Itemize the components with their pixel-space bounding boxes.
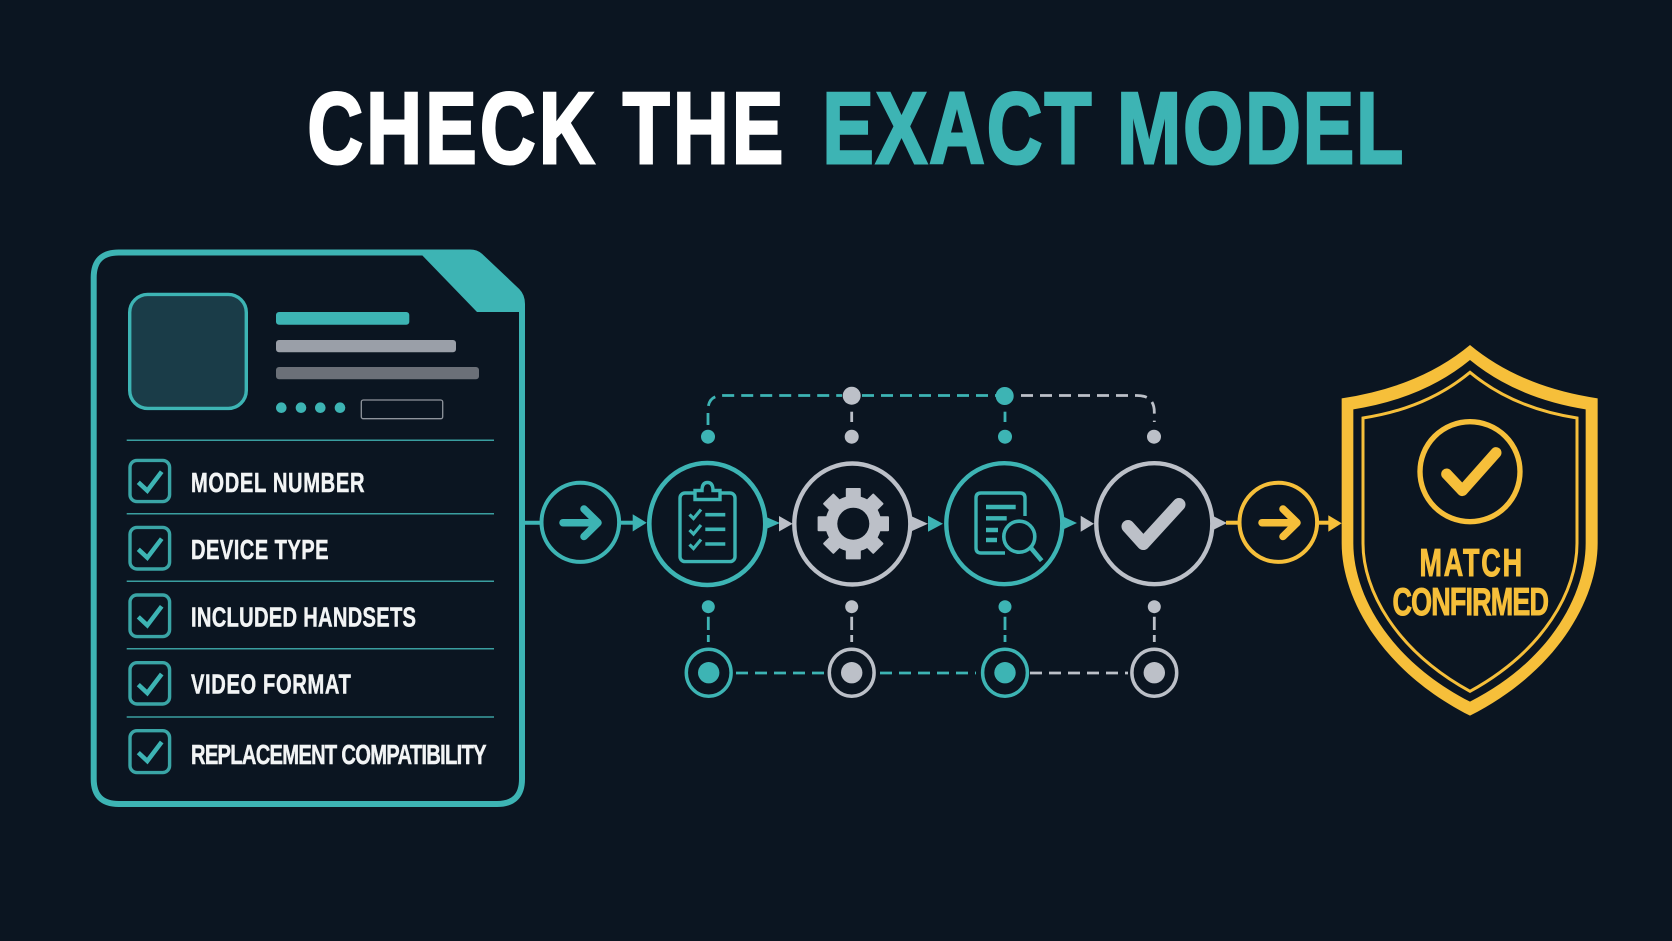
checklist item: included handsets	[130, 595, 416, 637]
checklist item: device type: DEVICE TYPE	[191, 535, 329, 566]
checklist item: replacement compatibility: REPLACEMENT COMPATIBILITY	[191, 740, 487, 771]
arrow: step 2 to step 3	[912, 516, 943, 532]
top dashed connector	[708, 396, 1154, 425]
step arrow: entry	[522, 483, 647, 562]
title	[308, 73, 1403, 185]
step: gear	[794, 464, 910, 584]
checklist item: replacement compatibility	[130, 731, 487, 773]
checklist item: model number	[130, 460, 365, 502]
checklist item: video format	[130, 663, 351, 704]
title: white part: CHECK THE	[308, 73, 783, 185]
arrow: step 3 to step 4	[1063, 516, 1094, 532]
shield label	[1392, 542, 1549, 624]
folded corner	[419, 252, 525, 312]
small input box	[361, 400, 443, 419]
title: teal part: EXACT MODEL	[822, 73, 1403, 185]
top nodes	[701, 387, 1161, 444]
shield label: MATCH	[1420, 542, 1522, 585]
icon: check in circle	[1420, 422, 1520, 522]
arrow: step 4 to gold	[1213, 516, 1240, 530]
icon: check mark	[1128, 504, 1179, 544]
bottom dashed connector	[708, 617, 1154, 673]
text bar light	[276, 340, 456, 352]
panel outline	[94, 252, 522, 804]
panel: product spec document	[94, 252, 525, 804]
checklist item: model number: MODEL NUMBER	[191, 468, 365, 499]
icon: document with magnifier	[976, 493, 1042, 561]
status dots	[276, 402, 345, 413]
checklist item: included handsets: INCLUDED HANDSETS	[191, 603, 416, 634]
icon: clipboard	[680, 482, 735, 562]
shield shape	[1342, 345, 1598, 716]
icon: gear	[818, 488, 889, 559]
heading bar	[276, 312, 409, 325]
step: document search	[946, 463, 1062, 584]
product image placeholder	[130, 294, 246, 408]
bottom nodes	[686, 600, 1177, 696]
checklist item: video format: VIDEO FORMAT	[191, 670, 351, 701]
step arrow: gold	[1240, 483, 1342, 562]
step: clipboard checklist	[649, 463, 765, 585]
arrow: step 1 to step 2	[765, 516, 793, 532]
shield: match confirmed	[1342, 345, 1598, 716]
step: check	[1096, 463, 1212, 584]
text bar dark	[276, 367, 479, 379]
shield label: CONFIRMED	[1392, 581, 1549, 624]
checklist item: device type	[130, 527, 329, 569]
